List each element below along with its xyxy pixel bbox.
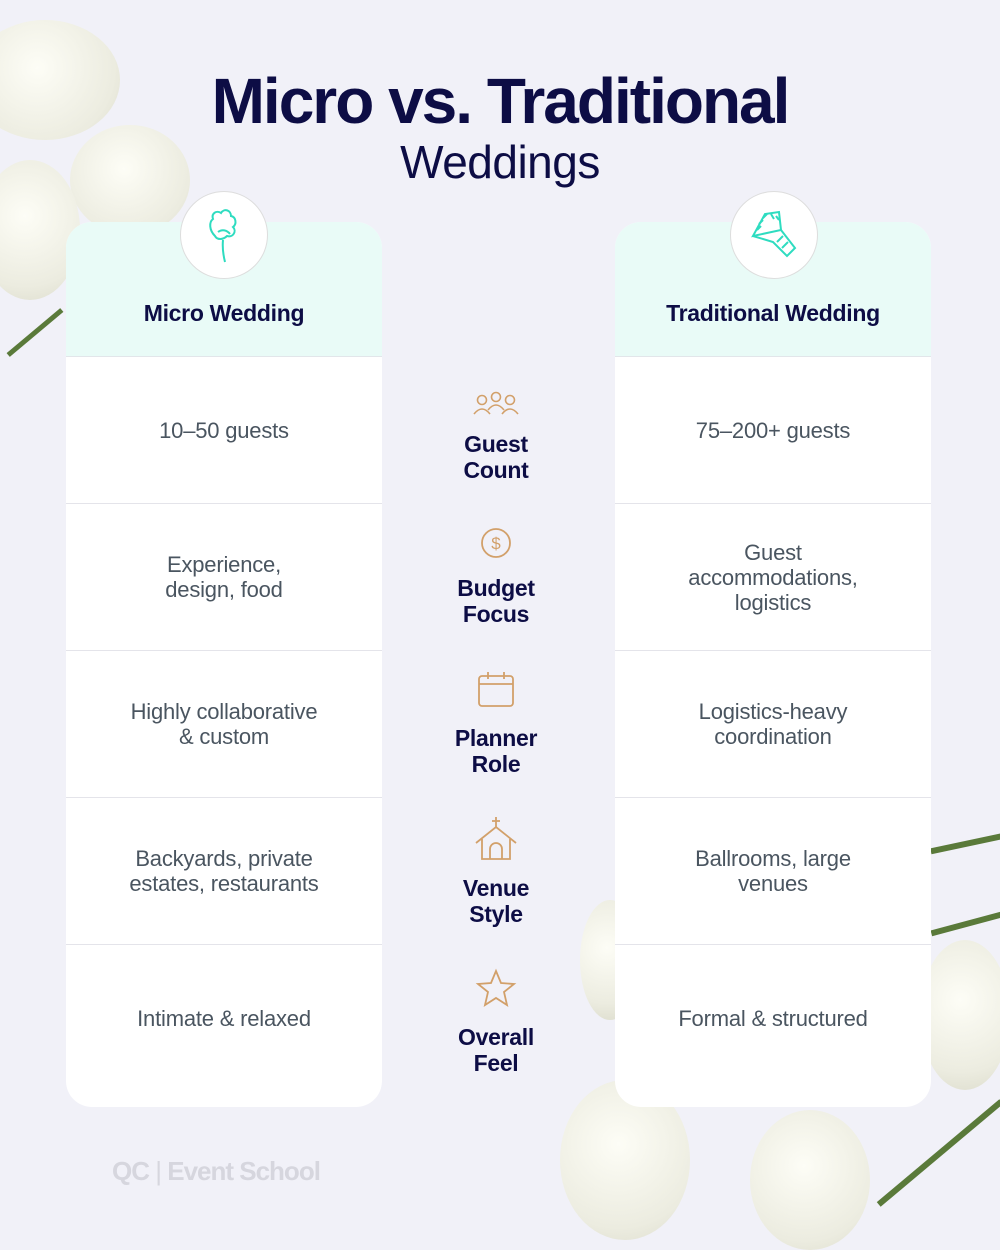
decorative flowers top left — [0, 20, 190, 357]
title — [212, 65, 788, 188]
panel: micro wedding: design, food — [165, 577, 283, 602]
label: budget focus — [457, 575, 535, 627]
panel: micro wedding: & custom — [179, 724, 269, 749]
icon: flower — [180, 191, 268, 279]
icon: guests — [474, 392, 518, 414]
panel: micro wedding: estates, restaurants — [129, 871, 319, 896]
label: overall feel — [458, 1024, 534, 1076]
label: guest count: Guest — [464, 431, 528, 457]
label: planner role: Role — [472, 751, 520, 777]
decorative flowers bottom right — [560, 834, 1000, 1250]
icon: dollar: $ — [491, 534, 501, 553]
panel: micro wedding: Highly collaborative — [131, 699, 317, 724]
panel: traditional wedding: Ballrooms, large — [695, 846, 851, 871]
panel: micro wedding: 10–50 guests — [159, 418, 289, 442]
panel: traditional wedding: Guest — [744, 540, 802, 564]
icon: star — [476, 968, 516, 1007]
panel: traditional wedding: logistics — [735, 590, 811, 614]
header: micro — [66, 222, 382, 357]
panel: traditional wedding: Formal & structured — [678, 1006, 868, 1030]
panel: traditional wedding: coordination — [714, 724, 832, 749]
title: Weddings — [400, 136, 600, 188]
panel: micro wedding: Intimate & relaxed — [137, 1006, 311, 1030]
panel: micro wedding: Backyards, private — [135, 846, 313, 871]
panel: micro wedding: Experience, — [167, 552, 281, 577]
header: micro: Micro Wedding — [144, 300, 304, 326]
panel: traditional wedding: accommodations, — [688, 564, 858, 590]
panel: traditional wedding: 75–200+ guests — [696, 418, 850, 442]
label: overall feel: Overall — [458, 1024, 534, 1050]
label: venue style: Venue — [463, 875, 529, 901]
label: budget focus: Budget — [457, 575, 535, 601]
label: guest count: Count — [464, 457, 528, 483]
icon: chapel — [476, 817, 516, 860]
header: traditional: Traditional Wedding — [666, 300, 880, 326]
panel: micro wedding — [66, 222, 382, 1107]
label: planner role — [455, 725, 538, 777]
label: venue style — [463, 875, 529, 927]
label: planner role: Planner — [455, 725, 537, 751]
title: Micro vs. Traditional — [212, 65, 788, 137]
label: venue style: Style — [469, 901, 523, 927]
label: budget focus: Focus — [463, 601, 529, 627]
icon: dollar — [481, 528, 511, 558]
logo: QC | Event School — [112, 1156, 320, 1186]
label: guest count — [464, 431, 528, 483]
icon: calendar — [478, 672, 514, 707]
label: overall feel: Feel — [474, 1050, 518, 1076]
icon: bouquet — [730, 191, 818, 279]
panel: traditional wedding — [615, 222, 931, 1107]
header: traditional — [615, 222, 931, 357]
panel: traditional wedding: venues — [738, 871, 808, 896]
panel: traditional wedding: Logistics-heavy — [699, 699, 847, 724]
